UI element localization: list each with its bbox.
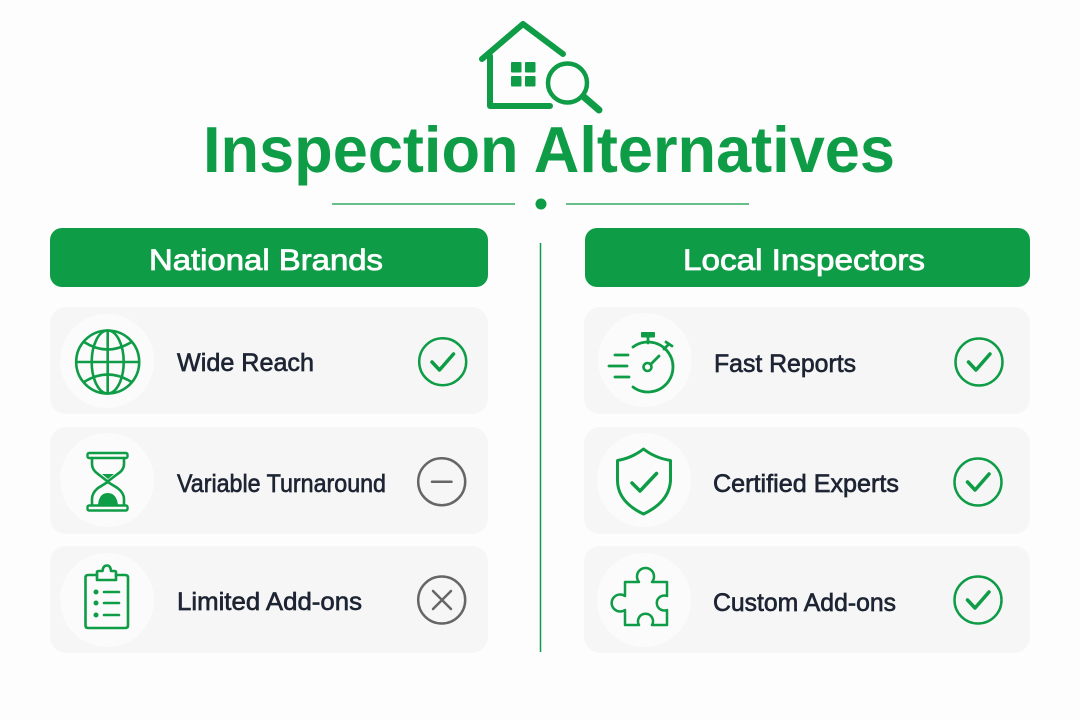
icon: puzzle piece — [612, 568, 667, 625]
icon: clipboard checklist — [86, 566, 128, 628]
row: Wide Reach — [50, 307, 488, 414]
row: Certified Experts: Certified Experts — [713, 470, 899, 498]
icon: globe — [76, 330, 139, 394]
icon: check status — [954, 576, 1002, 624]
row: Variable Turnaround: Variable Turnaround — [177, 470, 386, 498]
title: Inspection Alternatives — [203, 113, 895, 186]
row: Fast Reports — [584, 307, 1030, 414]
row: Custom Add-ons: Custom Add-ons — [713, 589, 896, 617]
icon: stopwatch — [609, 332, 673, 392]
row: Certified Experts — [584, 427, 1030, 534]
icon: cross status — [418, 576, 465, 624]
icon: minus status — [418, 458, 465, 505]
icon: house with magnifying glass — [482, 24, 599, 110]
heading: National Brands: National Brands — [149, 244, 383, 277]
heading: Local Inspectors: Local Inspectors — [683, 244, 925, 277]
icon: check status — [954, 458, 1002, 506]
icon: check status — [419, 338, 466, 385]
panel: Local Inspectors — [584, 228, 1030, 653]
panel: National Brands — [50, 228, 488, 653]
title divider — [332, 198, 749, 210]
heading: Local Inspectors — [585, 228, 1030, 287]
row: Fast Reports: Fast Reports — [714, 350, 856, 378]
row: Custom Add-ons — [584, 546, 1030, 653]
icon: check status — [956, 338, 1002, 386]
icon: hourglass — [88, 453, 128, 510]
icon: shield with check — [618, 449, 670, 514]
row: Limited Add-ons: Limited Add-ons — [177, 588, 362, 616]
row: Variable Turnaround — [50, 427, 488, 534]
row: Limited Add-ons — [50, 546, 488, 653]
column divider line — [540, 243, 542, 652]
row: Wide Reach: Wide Reach — [177, 349, 314, 377]
heading: National Brands — [50, 228, 488, 287]
